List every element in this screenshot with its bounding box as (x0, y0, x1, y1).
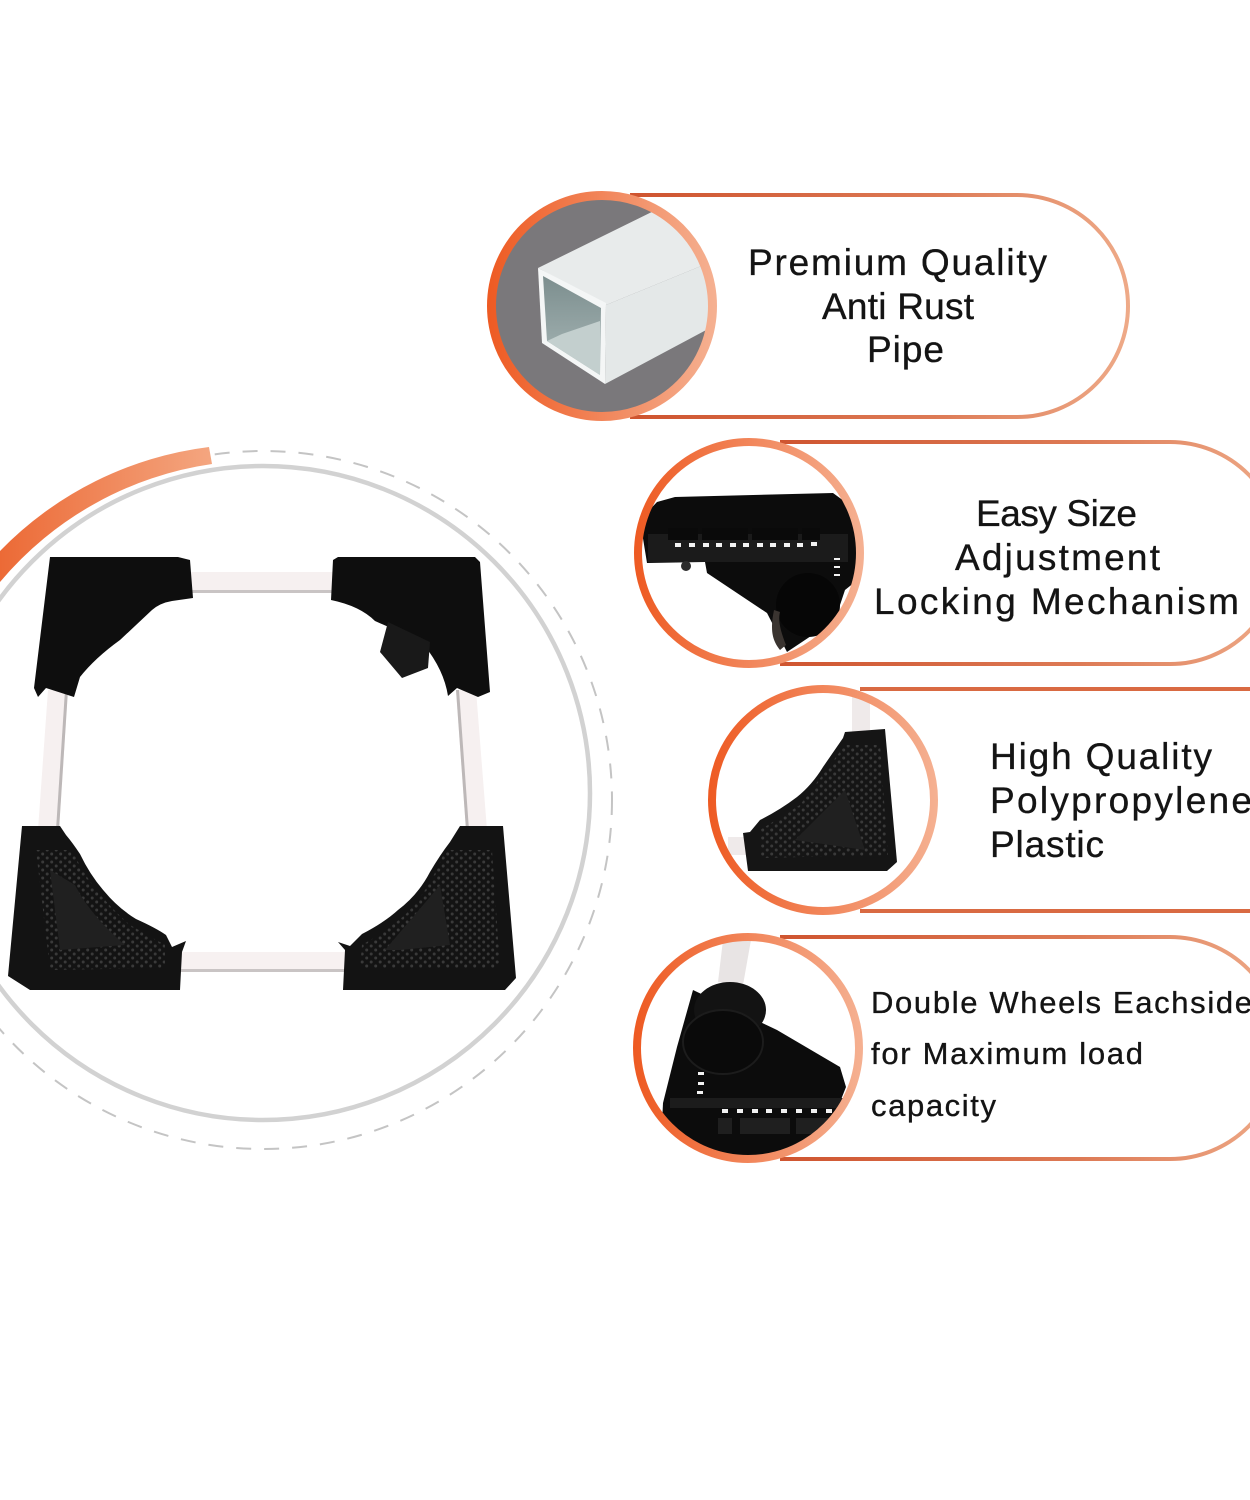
pill outline (780, 442, 1250, 664)
stand: bottom-left corner (8, 826, 186, 990)
grey inner ring (0, 466, 590, 1120)
thumbnail ring (638, 442, 860, 664)
knob (380, 622, 430, 678)
feature 2: locking mechanism (638, 442, 1250, 664)
caption: Polypropylene (990, 780, 1250, 821)
thumbnail: double wheels (662, 941, 846, 1155)
caption: High Quality (990, 736, 1212, 777)
thumbnail ring (637, 937, 859, 1159)
stand: top-left corner (34, 557, 193, 697)
caption: for Maximum load (871, 1036, 1143, 1071)
caption: Plastic (990, 824, 1104, 865)
stand: white rails (38, 572, 487, 972)
caption: Premium Quality (748, 242, 1048, 283)
caption: Pipe (867, 329, 944, 370)
product panel: stand inside rings (0, 447, 612, 1149)
caption (990, 736, 1250, 865)
caption (874, 493, 1239, 622)
caption (748, 242, 1048, 370)
thumbnail ring (492, 196, 712, 416)
orange arc accent (0, 447, 212, 582)
caption: capacity (871, 1088, 996, 1123)
pill outline (630, 195, 1128, 417)
caption: Adjustment (955, 537, 1161, 578)
thumbnail: plastic corner (728, 697, 897, 871)
pill outline (780, 937, 1250, 1159)
pill outline (860, 689, 1250, 911)
dashed outer ring (0, 451, 612, 1149)
thumbnail: square pipe (496, 200, 708, 412)
stand: top-right corner (331, 557, 490, 697)
caption: Locking Mechanism (874, 581, 1239, 622)
thumbnail: locking bar (643, 493, 856, 652)
feature 3: polypropylene plastic (712, 689, 1250, 911)
caption: Easy Size (976, 493, 1137, 534)
thumbnail ring (712, 689, 934, 911)
stand: bottom-right corner (338, 826, 516, 990)
feature 1: anti rust pipe (487, 191, 1128, 421)
caption: Double Wheels Eachside (871, 985, 1250, 1020)
caption: Anti Rust (822, 286, 975, 327)
feature 4: double wheels (637, 937, 1250, 1165)
caption (871, 985, 1250, 1123)
